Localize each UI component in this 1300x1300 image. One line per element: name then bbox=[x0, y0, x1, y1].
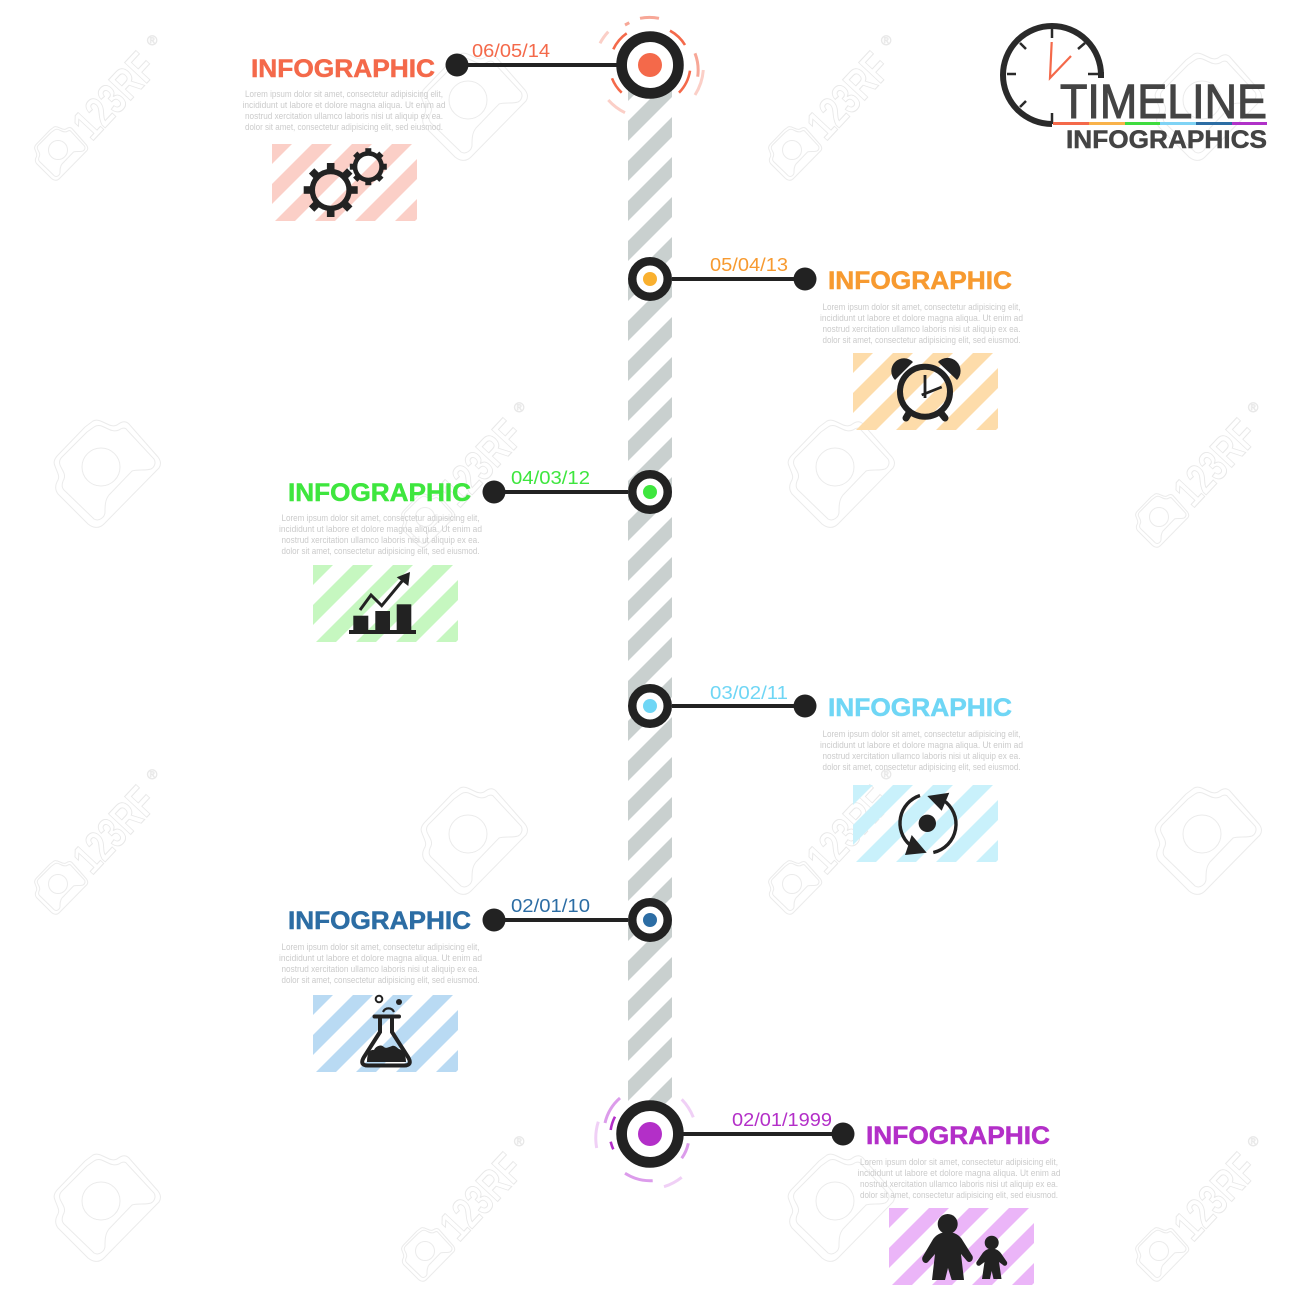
watermark pattern: 123RF bbox=[1164, 411, 1267, 516]
body text: incididunt ut labore et dolore magna aliqua. Ut enim ad bbox=[279, 524, 482, 534]
body text: incididunt ut labore et dolore magna aliqua. Ut enim ad bbox=[242, 100, 446, 110]
body text bbox=[820, 302, 1023, 345]
body text: nostrud xercitation ullamco laboris nisi ut aliquip ex ea. bbox=[822, 324, 1020, 334]
body text: Lorem ipsum dolor sit amet, consectetur adipisicing elit, bbox=[282, 513, 480, 523]
heading: INFOGRAPHIC bbox=[828, 267, 1012, 295]
icon: gears bbox=[304, 148, 387, 217]
event 6: 02/01/1999 bbox=[596, 1098, 1060, 1285]
body text: incididunt ut labore et dolore magna aliqua. Ut enim ad bbox=[279, 953, 482, 963]
connector line bbox=[482, 480, 628, 504]
watermark pattern: ® bbox=[1248, 1133, 1259, 1149]
watermark pattern: 123RF bbox=[797, 778, 900, 883]
body text bbox=[279, 513, 482, 556]
connector line bbox=[672, 268, 816, 290]
timeline node bbox=[622, 1106, 678, 1162]
heading: INFOGRAPHIC bbox=[866, 1122, 1050, 1150]
body text bbox=[279, 942, 482, 985]
watermark pattern: ® bbox=[514, 1133, 525, 1149]
heading: INFOGRAPHIC bbox=[288, 907, 471, 935]
body text: nostrud xercitation ullamco laboris nisi ut aliquip ex ea. bbox=[860, 1179, 1058, 1189]
date: 06/05/14 bbox=[472, 40, 550, 61]
watermark pattern: 123RF bbox=[430, 411, 533, 516]
event 2: 05/04/13 bbox=[632, 254, 1023, 430]
striped icon panel bbox=[313, 995, 458, 1072]
watermark pattern: 123RF bbox=[63, 44, 166, 149]
heading: INFOGRAPHIC bbox=[828, 694, 1012, 722]
timeline node bbox=[632, 688, 668, 724]
heading: INFOGRAPHIC bbox=[251, 55, 435, 83]
event 1: 06/05/14 bbox=[242, 17, 703, 221]
timeline node bbox=[632, 474, 668, 510]
body text: nostrud xercitation ullamco laboris nisi ut aliquip ex ea. bbox=[282, 964, 480, 974]
event 3: 04/03/12 bbox=[279, 467, 668, 642]
striped icon panel bbox=[889, 1208, 1034, 1285]
body text: nostrud xercitation ullamco laboris nisi ut aliquip ex ea. bbox=[822, 751, 1020, 761]
watermark pattern: ® bbox=[514, 399, 525, 415]
date: 02/01/10 bbox=[511, 895, 590, 916]
connector line bbox=[683, 1122, 854, 1146]
body text: nostrud xercitation ullamco laboris nisi ut aliquip ex ea. bbox=[282, 535, 480, 545]
icon: adult and child bbox=[922, 1214, 1007, 1280]
event 5: 02/01/10 bbox=[279, 895, 668, 1072]
striped icon panel bbox=[853, 353, 998, 430]
logo word: infographics: INFOGRAPHICS bbox=[1066, 126, 1267, 154]
body text: nostrud xercitation ullamco laboris nisi ut aliquip ex ea. bbox=[245, 111, 443, 121]
watermark pattern: 123RF bbox=[1164, 1145, 1267, 1250]
heading: INFOGRAPHIC bbox=[288, 479, 471, 507]
watermark pattern: ® bbox=[1248, 399, 1259, 415]
body text: Lorem ipsum dolor sit amet, consectetur adipisicing elit, bbox=[282, 942, 480, 952]
logo word: timeline: TIMELINE bbox=[1060, 76, 1267, 129]
watermark pattern: ® bbox=[147, 766, 158, 782]
icon: flask bbox=[362, 996, 410, 1066]
watermark pattern: 123RF bbox=[797, 44, 900, 149]
decorative node rings bbox=[600, 17, 703, 113]
connector line bbox=[672, 694, 816, 718]
striped icon panel bbox=[313, 565, 458, 642]
body text: Lorem ipsum dolor sit amet, consectetur adipisicing elit, bbox=[860, 1157, 1058, 1167]
decorative node rings bbox=[596, 1098, 693, 1187]
date: 02/01/1999 bbox=[732, 1109, 832, 1130]
watermark pattern: 123RF bbox=[63, 778, 166, 883]
body text: dolor sit amet, consectetur adipisicing elit, sed eiusmod. bbox=[860, 1190, 1058, 1200]
body text: incididunt ut labore et dolore magna aliqua. Ut enim ad bbox=[820, 740, 1023, 750]
body text: dolor sit amet, consectetur adipisicing elit, sed eiusmod. bbox=[282, 975, 480, 985]
body text: dolor sit amet, consectetur adipisicing elit, sed eiusmod. bbox=[822, 335, 1020, 345]
date: 03/02/11 bbox=[710, 682, 788, 703]
icon: growth chart bbox=[349, 572, 416, 634]
body text: dolor sit amet, consectetur adipisicing elit, sed eiusmod. bbox=[822, 762, 1020, 772]
timeline node bbox=[632, 261, 668, 297]
icon: alarm clock bbox=[891, 358, 961, 418]
body text bbox=[820, 729, 1023, 772]
timeline striped bar bbox=[628, 65, 672, 1134]
timeline node bbox=[632, 902, 668, 938]
connector line bbox=[482, 908, 628, 932]
body text: Lorem ipsum dolor sit amet, consectetur adipisicing elit, bbox=[822, 729, 1020, 739]
body text: dolor sit amet, consectetur adipisicing elit, sed eiusmod. bbox=[245, 122, 443, 132]
body text: incididunt ut labore et dolore magna aliqua. Ut enim ad bbox=[858, 1168, 1060, 1178]
watermark pattern: ® bbox=[881, 766, 892, 782]
watermark pattern: ® bbox=[881, 32, 892, 48]
icon: refresh cycle bbox=[900, 793, 956, 855]
striped icon panel bbox=[272, 144, 417, 221]
timeline node bbox=[622, 37, 678, 93]
body text: incididunt ut labore et dolore magna aliqua. Ut enim ad bbox=[820, 313, 1023, 323]
event 4: 03/02/11 bbox=[632, 682, 1023, 862]
date: 05/04/13 bbox=[710, 254, 788, 275]
body text: dolor sit amet, consectetur adipisicing elit, sed eiusmod. bbox=[282, 546, 480, 556]
body text bbox=[242, 89, 446, 132]
date: 04/03/12 bbox=[511, 467, 590, 488]
logo: timeline infographics bbox=[1003, 26, 1267, 154]
body text: Lorem ipsum dolor sit amet, consectetur adipisicing elit, bbox=[822, 302, 1020, 312]
connector line bbox=[446, 54, 627, 76]
rainbow rule bbox=[1053, 122, 1267, 125]
striped icon panel bbox=[853, 785, 998, 862]
body text bbox=[858, 1157, 1060, 1200]
watermark pattern: 123RF bbox=[430, 1145, 533, 1250]
icon: clock bbox=[1003, 26, 1104, 124]
body text: Lorem ipsum dolor sit amet, consectetur adipisicing elit, bbox=[245, 89, 443, 99]
watermark pattern: ® bbox=[147, 32, 158, 48]
